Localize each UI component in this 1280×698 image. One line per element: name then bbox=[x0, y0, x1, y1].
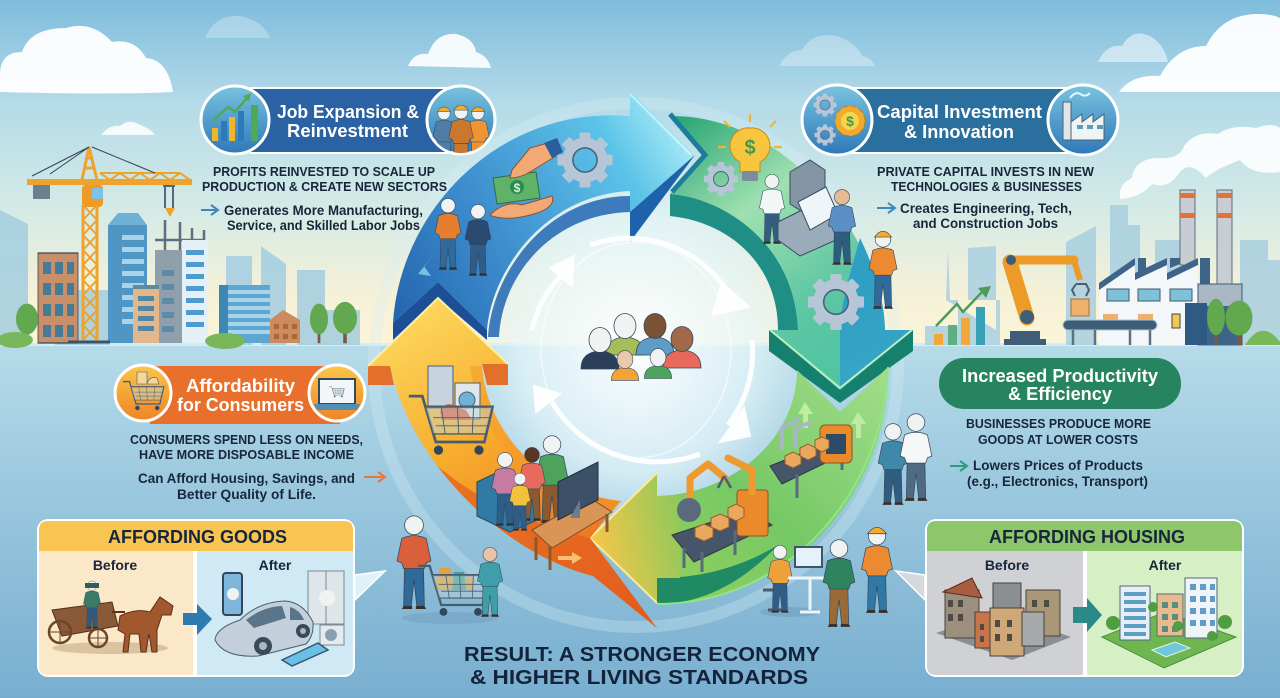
panel: affording goods bbox=[37, 519, 385, 677]
washing unit bbox=[320, 625, 344, 645]
text: capital investment body: PRIVATE CAPITAL INVESTS IN NEW bbox=[877, 164, 1095, 179]
worker with hard hat bbox=[862, 527, 892, 613]
icon: workers circle bbox=[426, 84, 496, 156]
heading: job expansion bbox=[200, 84, 496, 156]
panel: affording housing bbox=[896, 519, 1244, 677]
icon: laptop circle bbox=[309, 365, 365, 421]
tan building bbox=[133, 285, 159, 343]
text: affordability body: HAVE MORE DISPOSABLE INCOME bbox=[139, 447, 354, 462]
machine with scientist and engineer bbox=[759, 160, 856, 265]
robot conveyor small bbox=[770, 418, 852, 498]
heading: affordability: for Consumers bbox=[177, 394, 304, 415]
factory scene right bbox=[934, 190, 1280, 346]
text: job expansion body: PRODUCTION & CREATE NEW SECTORS bbox=[202, 179, 447, 194]
text: productivity body bbox=[950, 416, 1151, 489]
text: productivity body: (e.g., Electronics, Transport) bbox=[967, 474, 1148, 489]
horse and cart bbox=[49, 581, 173, 654]
illustration: hand with money: $ bbox=[514, 181, 521, 195]
icon: factory circle bbox=[1048, 85, 1118, 155]
fridge bbox=[308, 571, 344, 624]
result title: RESULT: A STRONGER ECONOMY bbox=[464, 643, 820, 666]
text: capital investment body: and Construction Jobs bbox=[913, 216, 1058, 231]
building under construction bbox=[155, 220, 208, 343]
family on sofa with computer bbox=[477, 436, 612, 570]
central family bbox=[581, 314, 701, 380]
text: capital investment body: Creates Engineering, Tech, bbox=[900, 201, 1072, 216]
after side bbox=[183, 551, 353, 675]
text: affordability body: CONSUMERS SPEND LESS ON NEEDS, bbox=[130, 432, 363, 447]
heading: affordability bbox=[115, 365, 365, 424]
heading: productivity bbox=[939, 358, 1181, 409]
after side: After bbox=[1149, 557, 1182, 573]
heading: capital investment: & Innovation bbox=[904, 121, 1014, 142]
after side: After bbox=[259, 557, 292, 573]
shopper and child with cart bbox=[397, 516, 503, 624]
heading: capital investment bbox=[802, 85, 1118, 155]
people: blue arrow pair bbox=[435, 198, 491, 276]
robot arm bbox=[1004, 255, 1089, 345]
arrow: job expansion blue bbox=[393, 91, 695, 340]
panel: affording goods: AFFORDING GOODS bbox=[108, 526, 287, 547]
text: productivity body: Lowers Prices of Products bbox=[973, 458, 1143, 473]
icon: large gear on green arrow bbox=[808, 274, 864, 330]
before side bbox=[927, 551, 1083, 675]
people: two managers bbox=[878, 414, 932, 505]
heading: affordability: Affordability bbox=[186, 375, 296, 396]
before side: Before bbox=[985, 557, 1029, 573]
after side bbox=[1073, 551, 1242, 675]
result title: & HIGHER LIVING STANDARDS bbox=[470, 666, 808, 689]
text: job expansion body bbox=[201, 164, 447, 233]
text: affordability body: Can Afford Housing, Savings, and bbox=[138, 471, 355, 486]
small brick house bbox=[270, 310, 300, 343]
icon: cart circle bbox=[115, 365, 171, 421]
text: affordability body bbox=[130, 432, 385, 502]
central glow bbox=[374, 103, 898, 627]
heading: capital investment: Capital Investment bbox=[877, 101, 1042, 122]
trees bbox=[1106, 602, 1232, 641]
arrow: capital investment green bbox=[670, 114, 913, 403]
icon: small green gear bbox=[704, 162, 738, 196]
icon: bar chart circle bbox=[201, 86, 269, 154]
text: job expansion body: Service, and Skilled Labor Jobs bbox=[227, 218, 420, 233]
housing arrow bbox=[1073, 598, 1102, 632]
factory smoke bbox=[1120, 125, 1280, 199]
factory building bbox=[1099, 190, 1242, 345]
blue office block bbox=[219, 285, 270, 343]
goods arrow bbox=[183, 604, 212, 635]
text: affordability body: Better Quality of Life. bbox=[177, 487, 316, 502]
pool bbox=[1152, 642, 1190, 657]
growth chart bbox=[934, 286, 991, 345]
car bbox=[215, 601, 313, 656]
tower crane bbox=[27, 147, 192, 342]
inner circular white arrows bbox=[532, 238, 753, 462]
old houses block bbox=[936, 578, 1071, 660]
shopping cart with appliances bbox=[409, 366, 492, 455]
text: capital investment body bbox=[877, 164, 1095, 231]
before side: Before bbox=[93, 557, 137, 573]
text: job expansion body: Generates More Manufacturing, bbox=[224, 203, 423, 218]
worker with tablet bbox=[869, 231, 897, 309]
tablet bbox=[282, 643, 328, 666]
icon: blue gear bbox=[558, 132, 612, 188]
text: productivity body: BUSINESSES PRODUCE MORE bbox=[966, 416, 1151, 431]
crane and city left bbox=[0, 147, 357, 349]
robot conveyor large bbox=[672, 458, 772, 572]
arrow: productivity lime green bbox=[590, 367, 888, 604]
text: job expansion body: PROFITS REINVESTED TO SCALE UP bbox=[213, 164, 435, 179]
text: productivity body: GOODS AT LOWER COSTS bbox=[978, 432, 1138, 447]
trees left bbox=[0, 302, 357, 349]
arrow: affordability orange bbox=[368, 298, 657, 628]
trees right bbox=[1207, 299, 1280, 346]
panel: affording housing: AFFORDING HOUSING bbox=[989, 526, 1185, 547]
result title bbox=[464, 643, 820, 689]
before side bbox=[39, 551, 193, 675]
park ground bbox=[1102, 612, 1236, 668]
clouds bbox=[0, 14, 1280, 135]
heading: productivity: & Efficiency bbox=[1008, 383, 1113, 404]
towers bbox=[1120, 578, 1217, 640]
icon: idea bulb with dollar: $ bbox=[744, 137, 756, 159]
icon: gears with dollar circle bbox=[802, 85, 872, 155]
heading: job expansion: Reinvestment bbox=[287, 120, 408, 141]
desk worker and colleague bbox=[760, 540, 855, 627]
conveyor bbox=[1063, 314, 1157, 345]
icon: gears with dollar circle: $ bbox=[846, 113, 854, 129]
illustration: hand with money bbox=[490, 138, 563, 218]
icon: idea bulb with dollar bbox=[718, 114, 782, 181]
skyline left bbox=[0, 210, 360, 345]
text: capital investment body: TECHNOLOGIES & BUSINESSES bbox=[891, 179, 1082, 194]
skyline right bbox=[925, 205, 1280, 345]
phone bbox=[223, 573, 242, 615]
heading: job expansion: Job Expansion & bbox=[277, 101, 419, 122]
heading: productivity: Increased Productivity bbox=[962, 365, 1159, 386]
brown apartment building bbox=[38, 253, 78, 343]
